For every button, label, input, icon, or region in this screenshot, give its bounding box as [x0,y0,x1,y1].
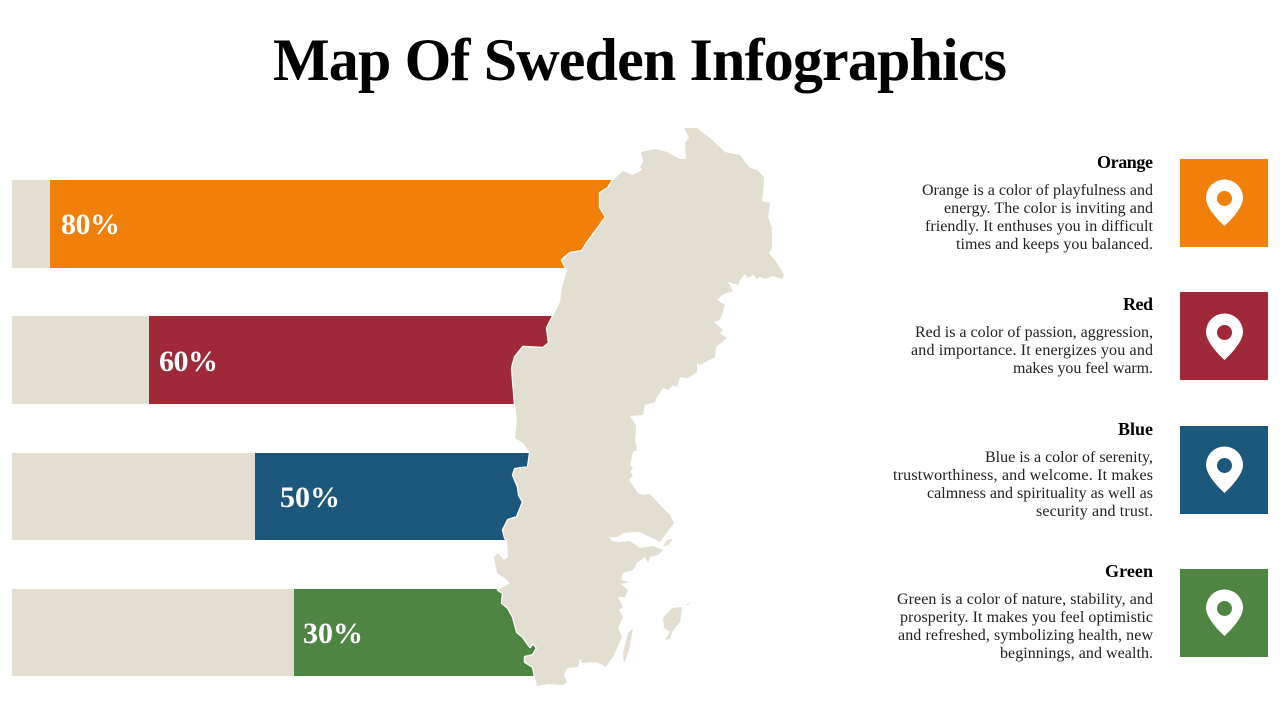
panel: red [911,292,1268,380]
red description: makes you feel warm. [1013,360,1153,377]
orange description [922,152,1154,253]
red description: Red [1123,294,1153,314]
blue description: security and trust. [1036,503,1153,520]
orange description: friendly. It enthuses you in difficult [925,218,1154,235]
green description: beginnings, and wealth. [1000,645,1153,662]
bar: green 30%: 30% [303,617,363,650]
bar: blue 50% [12,453,565,540]
orange description: times and keeps you balanced. [956,236,1153,253]
panel: green [897,561,1268,662]
blue description: trustworthiness, and welcome. It makes [893,467,1153,484]
blue description: Blue [1118,419,1153,439]
orange description: energy. The color is inviting and [944,200,1153,217]
icon: green pin [1180,569,1268,657]
panel: blue [893,419,1268,520]
red description: Red is a color of passion, aggression, [915,324,1153,341]
bar chart [12,180,620,676]
icon: blue pin [1180,426,1268,514]
red description: and importance. It energizes you and [911,342,1153,359]
green description: prosperity. It makes you feel optimistic [900,609,1153,626]
blue description: calmness and spirituality as well as [927,485,1153,502]
orange description: Orange [1097,152,1153,172]
island: Gotland [663,602,692,640]
green description: Green is a color of nature, stability, and [897,591,1153,608]
green description: and refreshed, symbolizing health, new [898,627,1153,644]
bar: red 60% [12,316,579,404]
bar: blue 50%: 50% [280,481,340,514]
icon: orange pin [1180,159,1268,247]
map of Sweden [494,128,784,686]
island: Oland [623,628,633,663]
bar: orange 80%: 80% [61,208,120,241]
panel: orange [922,152,1268,253]
orange description: Orange is a color of playfulness and [922,182,1153,199]
blue description [893,419,1153,520]
green description: Green [1105,561,1153,581]
icon: red pin [1180,292,1268,380]
bar: red 60%: 60% [159,345,218,378]
blue description: Blue is a color of serenity, [985,449,1153,466]
island: Aland side [663,539,673,547]
green description [897,561,1153,662]
bar: orange 80% [12,180,620,268]
title: Map Of Sweden Infographics [273,27,1007,93]
red description [911,294,1153,377]
bar: green 30% [12,589,554,676]
